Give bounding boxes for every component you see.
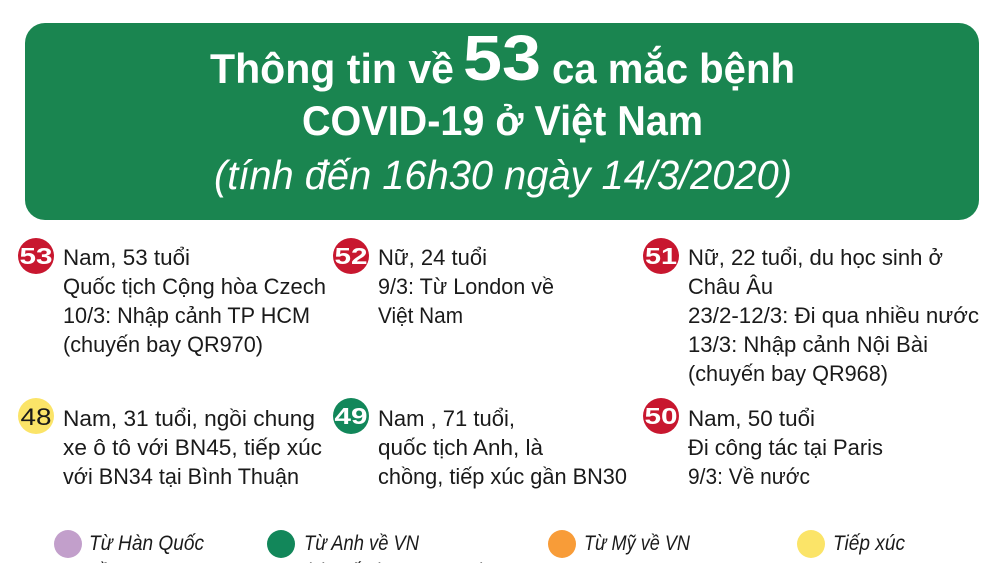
text case 50: Nam, 50 tuổi xyxy=(688,406,815,431)
text case 49: Nam , 71 tuổi, xyxy=(378,406,515,431)
legend item: from US: Từ Mỹ về VN xyxy=(584,532,691,555)
badge 53 xyxy=(18,238,54,274)
badge 49 xyxy=(333,398,369,434)
text case 53: (chuyến bay QR970) xyxy=(63,332,263,357)
text case 53: Nam, 53 tuổi xyxy=(63,245,190,270)
text case 51 xyxy=(688,245,979,386)
text case 50: 9/3: Về nước xyxy=(688,464,810,489)
legend item: from US xyxy=(548,530,691,558)
badge 50 xyxy=(643,398,679,434)
title line 1: 53 xyxy=(463,22,541,94)
case 50 xyxy=(643,398,883,489)
text case 53: Quốc tịch Cộng hòa Czech xyxy=(63,274,326,299)
title line 1: ca mắc bệnh xyxy=(552,44,795,92)
legend item: from Korea: Từ Hàn Quốc xyxy=(89,532,204,555)
legend item: contact: Tiếp xúc xyxy=(833,532,905,555)
badge 48: 48 xyxy=(20,404,52,431)
badge 51: 51 xyxy=(645,243,677,269)
text case 49: chồng, tiếp xúc gần BN30 xyxy=(378,464,627,489)
subtitle date: (tính đến 16h30 ngày 14/3/2020) xyxy=(214,152,792,198)
text case 51: 13/3: Nhập cảnh Nội Bài xyxy=(688,332,928,357)
case 49 xyxy=(333,398,627,489)
text case 48: với BN34 tại Bình Thuận xyxy=(63,464,299,489)
text case 48 xyxy=(63,406,322,489)
badge 52 xyxy=(333,238,369,274)
title line 2: COVID-19 ở Việt Nam xyxy=(302,97,703,144)
case 52 xyxy=(333,238,554,328)
text case 48: xe ô tô với BN45, tiếp xúc xyxy=(63,435,322,460)
badge 53: 53 xyxy=(20,243,52,269)
badge 51 xyxy=(643,238,679,274)
text case 52: 9/3: Từ London về xyxy=(378,274,554,299)
text case 52: Nữ, 24 tuổi xyxy=(378,245,487,270)
text case 52 xyxy=(378,245,554,328)
badge 50: 50 xyxy=(644,403,678,429)
title line 1 xyxy=(210,22,795,94)
text case 53 xyxy=(63,245,326,357)
badge 48 xyxy=(18,398,54,434)
case 53 xyxy=(18,238,326,357)
panel: title banner xyxy=(25,22,979,220)
text case 51: 23/2-12/3: Đi qua nhiều nước xyxy=(688,303,979,328)
text case 53: 10/3: Nhập cảnh TP HCM xyxy=(63,303,310,328)
text case 52: Việt Nam xyxy=(378,303,463,328)
title line 1: Thông tin về xyxy=(210,45,454,92)
text case 50 xyxy=(688,406,883,489)
legend item: contact xyxy=(797,530,905,558)
legend item: from UK xyxy=(267,530,485,563)
legend item: from Korea xyxy=(54,530,204,563)
text case 51: (chuyến bay QR968) xyxy=(688,361,888,386)
case 51 xyxy=(643,238,979,386)
legend item: from UK: Từ Anh về VN xyxy=(304,532,420,555)
text case 49 xyxy=(378,406,627,489)
text case 49: quốc tịch Anh, là xyxy=(378,435,543,460)
text case 50: Đi công tác tại Paris xyxy=(688,435,883,460)
text case 48: Nam, 31 tuổi, ngồi chung xyxy=(63,406,315,431)
badge 49: 49 xyxy=(334,403,368,429)
text case 51: Châu Âu xyxy=(688,274,773,299)
text case 51: Nữ, 22 tuổi, du học sinh ở xyxy=(688,245,943,270)
case 48 xyxy=(18,398,322,489)
legend xyxy=(54,530,905,563)
badge 52: 52 xyxy=(334,243,368,269)
